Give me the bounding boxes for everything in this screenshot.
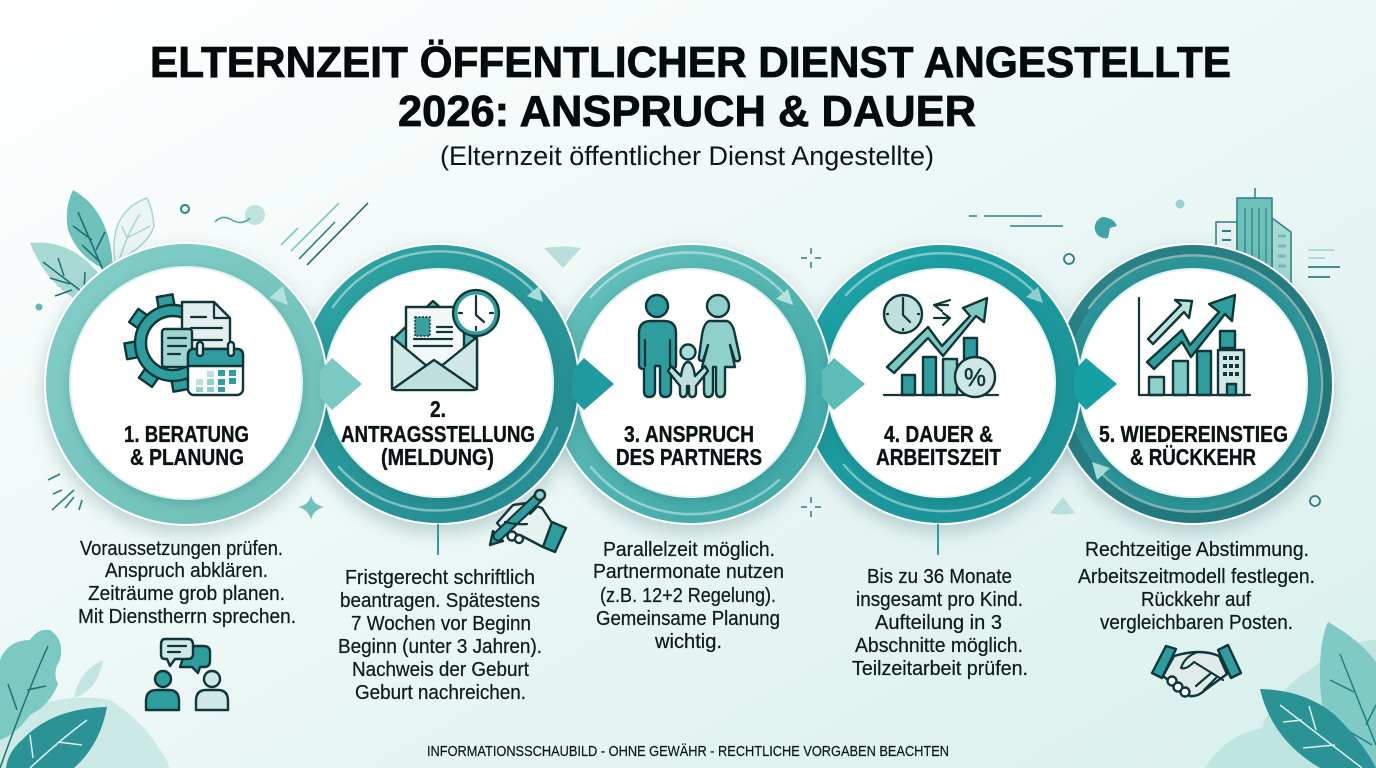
text block 5 xyxy=(1078,538,1315,634)
step 5 panel xyxy=(1079,269,1307,497)
subtitle: (Elternzeit öffentlicher Dienst Angestellte) xyxy=(440,141,934,171)
step 2 panel xyxy=(325,269,553,497)
heading 4: 4. DAUER & xyxy=(884,421,993,447)
icon: envelope with clock xyxy=(392,290,499,390)
icon: hand writing with pen xyxy=(490,490,566,552)
heading 2: ANTRAGSSTELLUNG xyxy=(341,421,535,447)
heading 4: ARBEITSZEIT xyxy=(876,444,1001,470)
text block 2: Geburt nachreichen. xyxy=(355,681,526,704)
heading 2 xyxy=(341,396,535,470)
title xyxy=(150,38,1231,136)
text block 2 xyxy=(338,566,542,704)
text block 4 xyxy=(852,565,1028,680)
text block 4: insgesamt pro Kind. xyxy=(856,588,1023,611)
text block 4: Bis zu 36 Monate xyxy=(867,565,1012,588)
text block 4: Teilzeitarbeit prüfen. xyxy=(852,657,1028,680)
ring 5 xyxy=(1053,244,1333,524)
heading 3: 3. ANSPRUCH xyxy=(624,421,754,447)
heading 2: (MELDUNG) xyxy=(381,444,494,470)
text block 2: beantragen. Spätestens xyxy=(340,589,540,612)
step 4 panel xyxy=(827,269,1055,497)
text block 5: Rechtzeitige Abstimmung. xyxy=(1085,538,1309,561)
connector line 2 xyxy=(437,524,439,555)
text block 2: 7 Wochen vor Beginn xyxy=(351,612,531,635)
heading 5: & RÜCKKEHR xyxy=(1130,444,1256,470)
ring 3 xyxy=(551,244,831,524)
heading 5 xyxy=(1099,421,1288,470)
text block 5: Rückkehr auf xyxy=(1141,588,1251,611)
decoration: bottom-left foliage xyxy=(0,630,170,768)
text block 3: Partnermonate nutzen xyxy=(593,560,784,583)
text block 2: Nachweis der Geburt xyxy=(352,658,529,681)
text block 3: Parallelzeit möglich. xyxy=(603,538,775,561)
icon: handshake xyxy=(1152,645,1241,696)
text block 1: Mit Dienstherrn sprechen. xyxy=(78,605,296,628)
footer note: INFORMATIONSSCHAUBILD - OHNE GEWÄHR - RECHTLICHE VORGABEN BEACHTEN xyxy=(427,743,949,760)
icon: gear with documents and calendar xyxy=(124,294,243,395)
text block 2: Beginn (unter 3 Jahren). xyxy=(338,635,542,658)
text block 3: Gemeinsame Planung xyxy=(596,607,780,630)
heading 1: 1. BERATUNG xyxy=(124,421,249,447)
text block 1: Anspruch abklären. xyxy=(105,559,268,582)
icon: chart with clock and percent: % xyxy=(964,364,986,392)
icon: conversation xyxy=(146,639,228,710)
ring 4 xyxy=(801,244,1081,524)
text block 5: vergleichbaren Posten. xyxy=(1100,611,1293,634)
decoration: lower accents xyxy=(48,474,1320,520)
decoration: top-left leaves xyxy=(30,190,154,304)
arrow 4 to 5 xyxy=(1074,358,1117,410)
heading 5: 5. WIEDEREINSTIEG xyxy=(1099,421,1288,447)
arrow 2 to 3 xyxy=(572,358,614,410)
text block 4: Aufteilung in 3 xyxy=(875,611,1002,634)
text block 1: Zeiträume grob planen. xyxy=(88,582,285,605)
text block 5: Arbeitszeitmodell festlegen. xyxy=(1078,565,1315,588)
title: ELTERNZEIT ÖFFENTLICHER DIENST ANGESTELLTE xyxy=(150,38,1231,87)
connector line 4 xyxy=(937,524,939,555)
heading 3: DES PARTNERS xyxy=(616,444,762,470)
arrow 3 to 4 xyxy=(822,358,865,410)
heading 2: 2. xyxy=(430,396,446,422)
decoration: top-middle triangle xyxy=(544,246,581,268)
icon: family xyxy=(639,295,740,397)
decoration: skyline xyxy=(1216,188,1291,290)
heading 4 xyxy=(876,421,1001,470)
text block 1 xyxy=(78,537,296,628)
step 1 panel xyxy=(70,267,302,499)
text block 2: Fristgerecht schriftlich xyxy=(345,566,535,589)
text block 3: wichtig. xyxy=(654,630,722,653)
icon: growth chart with building xyxy=(1139,295,1250,395)
text block 4: Abschnitte möglich. xyxy=(855,634,1023,657)
title: 2026: ANSPRUCH & DAUER xyxy=(398,87,976,136)
decoration: bottom-right foliage xyxy=(1205,622,1376,768)
heading 1 xyxy=(124,421,249,470)
icon: chart with clock and percent xyxy=(884,295,998,397)
heading 1: & PLANUNG xyxy=(130,444,244,470)
decoration: top-left accents xyxy=(36,203,368,310)
heading 3 xyxy=(616,421,762,470)
step 3 panel xyxy=(577,269,805,497)
text block 3: (z.B. 12+2 Regelung). xyxy=(600,584,776,607)
ring 2 xyxy=(299,244,579,524)
ring 1 xyxy=(45,243,327,525)
decoration: top-right accents xyxy=(801,200,1340,277)
arrow 1 to 2 xyxy=(320,358,362,410)
text block 1: Voraussetzungen prüfen. xyxy=(80,537,283,560)
text block 3 xyxy=(593,538,784,653)
